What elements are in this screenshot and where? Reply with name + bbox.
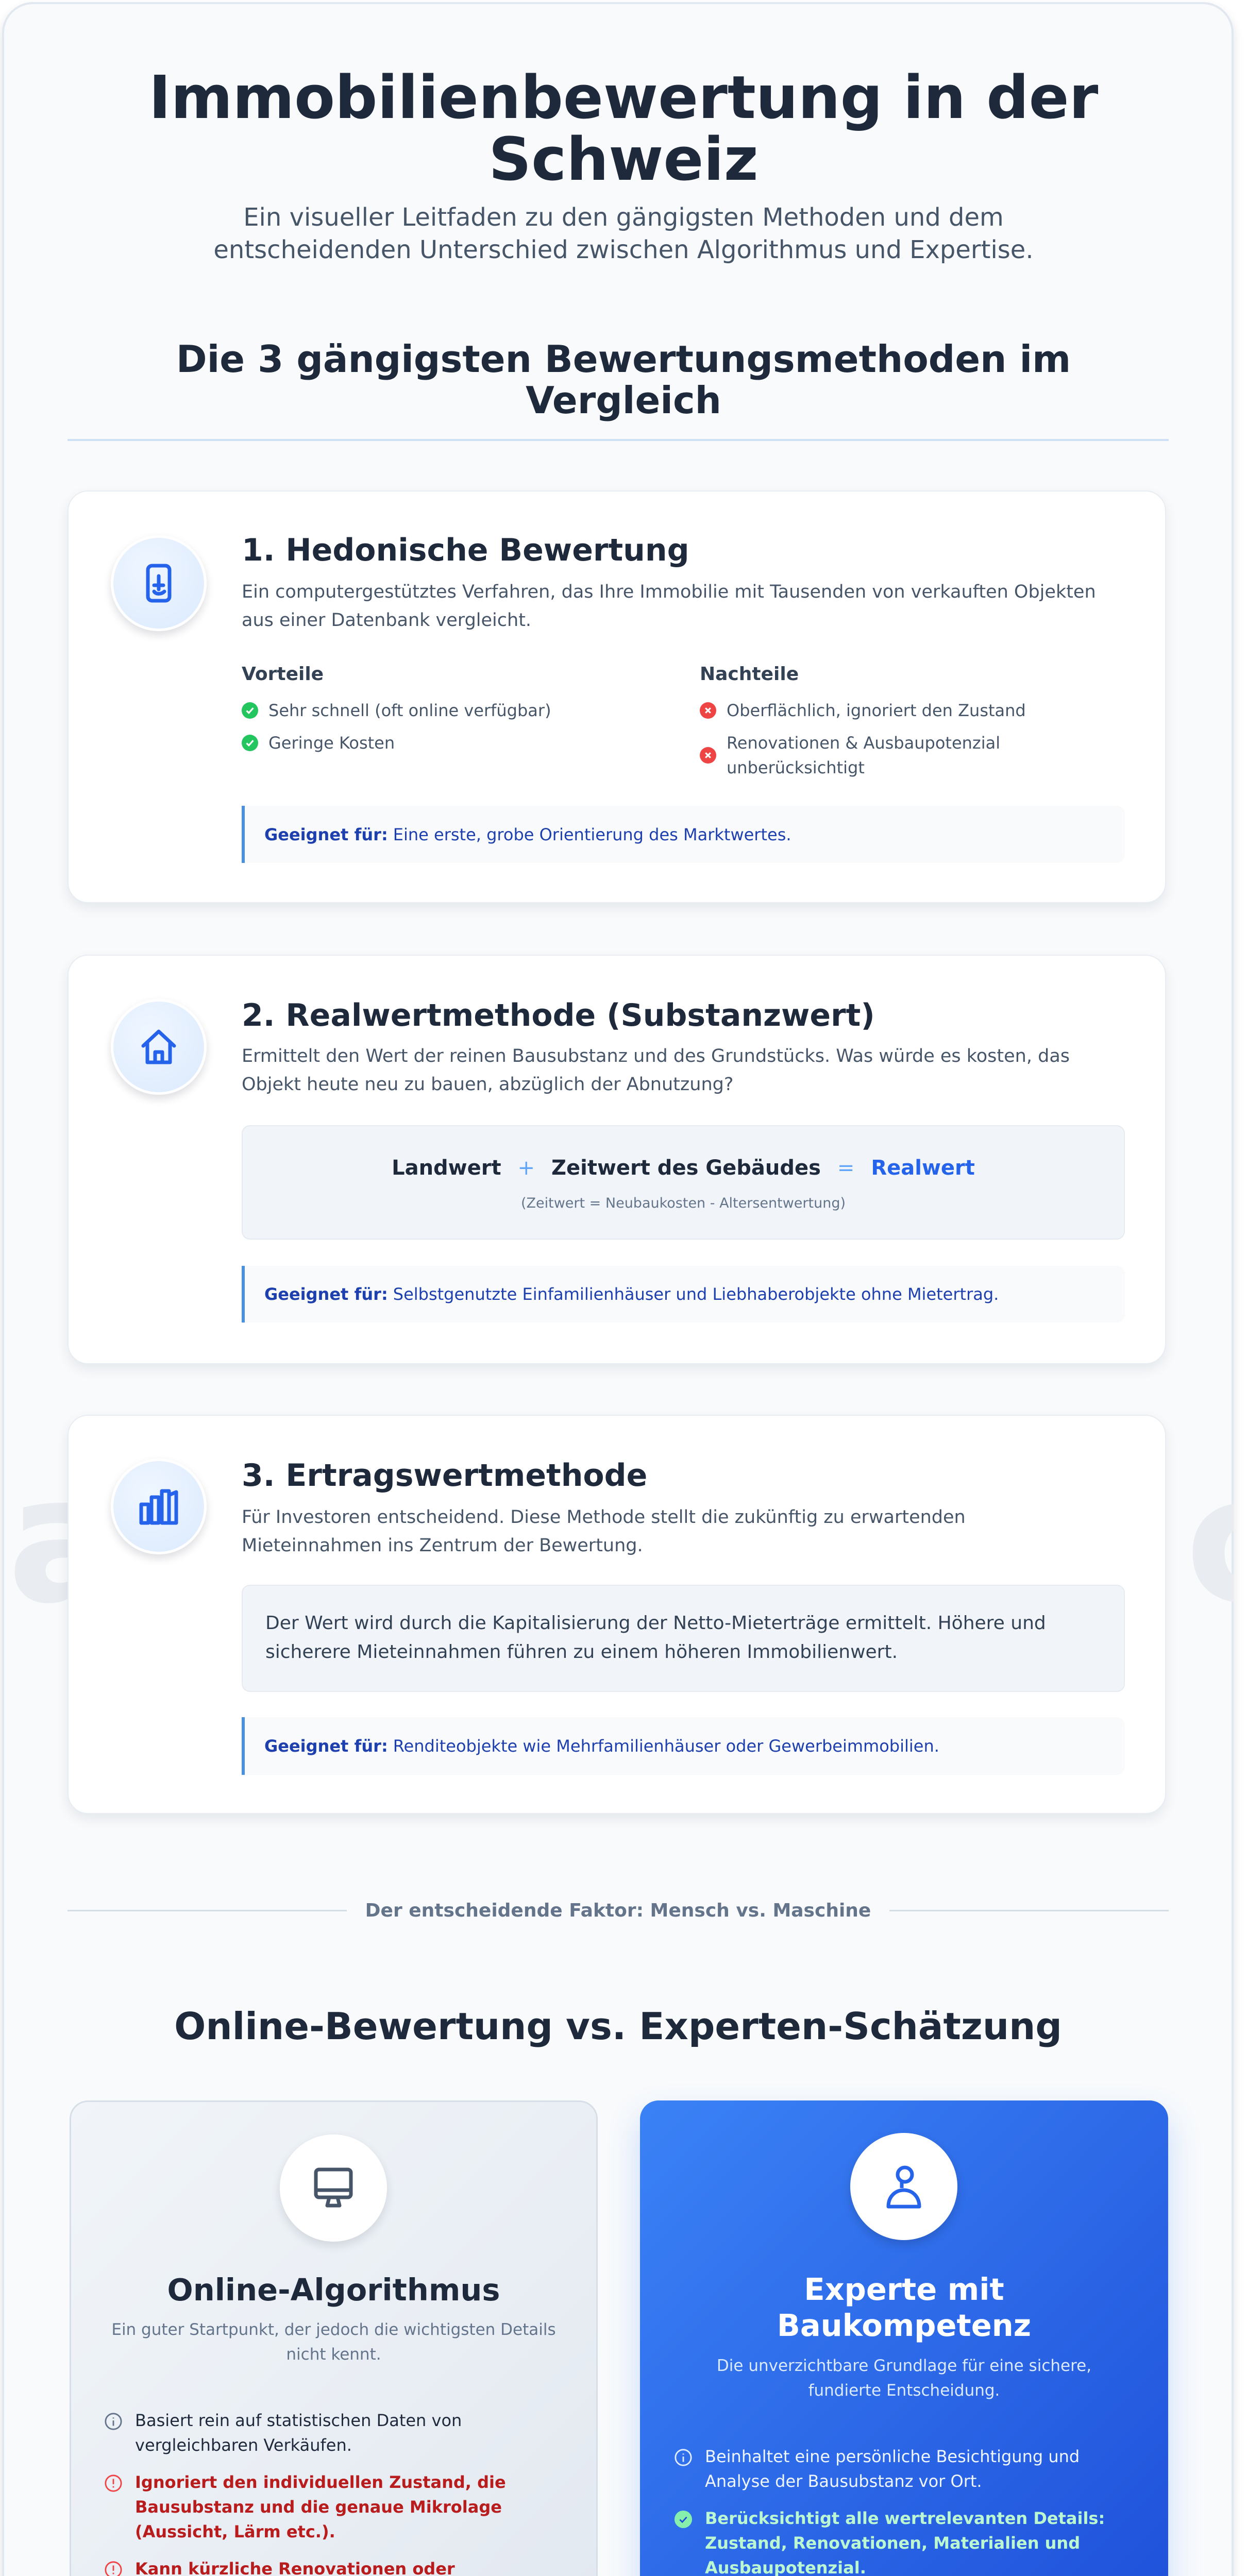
section heading: methods: Die 3 gängigsten Bewertungsmethoden im: [176, 337, 1071, 381]
panel: method 2 real value: [68, 955, 1166, 1364]
list: Basiert rein auf statistischen Daten von: [135, 2411, 462, 2430]
formula box: Landwert + Zeitwert des Gebäudes = Realwert: [392, 1156, 975, 1180]
heading: [777, 2272, 1031, 2343]
cons list: [700, 664, 1026, 777]
description: Ermittelt den Wert der reinen Bausubstanz und des Grundstücks. Was würde es kosten, das: [242, 1046, 1070, 1066]
heading: 3. Ertragswertmethode: [242, 1458, 647, 1494]
pros list: Sehr schnell (oft online verfügbar): [268, 701, 551, 720]
list: Zustand, Renovationen, Materialien und: [705, 2533, 1080, 2553]
list: [675, 2447, 1105, 2576]
pros list: Geringe Kosten: [268, 733, 395, 753]
description: Ein computergestütztes Verfahren, das Ihre Immobilie mit Tausenden von verkauften Objekten: [242, 582, 1096, 602]
title: Immobilienbewertung in der Schweiz: [149, 63, 1098, 194]
subtitle: [717, 2357, 1091, 2400]
description: [242, 1507, 966, 1556]
section heading: methods: [176, 337, 1071, 422]
heading: 1. Hedonische Bewertung: [242, 532, 689, 568]
icon: bar chart: [111, 1459, 207, 1554]
description: [242, 1046, 1070, 1095]
pros list: Vorteile: [242, 664, 324, 685]
cons list: Renovationen & Ausbaupotenzial: [727, 733, 1000, 753]
cons list: unberücksichtigt: [727, 758, 865, 777]
description: Mieteinnahmen ins Zentrum der Bewertung.: [242, 1535, 643, 1556]
subtitle: entscheidenden Unterschied zwischen Algorithmus und Expertise.: [213, 235, 1034, 264]
description: Objekt heute neu zu bauen, abzüglich der Abnutzung?: [242, 1074, 733, 1095]
subtitle: [213, 203, 1034, 264]
watermark letters: [7, 1438, 1234, 1642]
subtitle: Ein visueller Leitfaden zu den gängigsten Methoden und dem: [243, 203, 1004, 232]
watermark letters: a: [7, 1438, 125, 1642]
list: Berücksichtigt alle wertrelevanten Details:: [705, 2509, 1105, 2528]
callout: suitable for: Eine erste, grobe Orientierung des Marktwertes.: [393, 824, 791, 844]
list: Bausubstanz und die genaue Mikrolage: [135, 2497, 502, 2517]
callout: suitable for: Selbstgenutzte Einfamilienhäuser und Liebhaberobjekte ohne Mietertrag.: [393, 1284, 999, 1304]
pros list: [242, 664, 551, 753]
heading: Online-Algorithmus: [167, 2272, 500, 2308]
heading: Experte mit: [804, 2272, 1004, 2307]
description: aus einer Datenbank vergleicht.: [242, 610, 531, 631]
list: Analyse der Bausubstanz vor Ort.: [705, 2471, 982, 2491]
heading: 2. Realwertmethode (Substanzwert): [242, 997, 875, 1033]
section heading: methods: Vergleich: [526, 379, 721, 422]
icon: house: [111, 999, 207, 1095]
cons list: Oberflächlich, ignoriert den Zustand: [727, 701, 1026, 720]
formula box: (Zeitwert = Neubaukosten - Altersentwertung): [521, 1195, 846, 1211]
description: [242, 582, 1096, 631]
callout: suitable for: Geeignet für:: [264, 1284, 388, 1304]
list: vergleichbaren Verkäufen.: [135, 2435, 352, 2455]
icon: touch device: [111, 535, 207, 631]
callout: suitable for: [242, 1266, 1125, 1323]
callout: suitable for: Geeignet für:: [264, 1736, 388, 1756]
icon: person: [850, 2133, 957, 2240]
subtitle: nicht kennt.: [286, 2345, 381, 2364]
description: Für Investoren entscheidend. Diese Methode stellt die zukünftig zu erwartenden: [242, 1507, 966, 1528]
panel: online algorithm: [70, 2100, 598, 2576]
separator: human vs machine: Der entscheidende Faktor: Mensch vs. Maschine: [365, 1900, 871, 1921]
cons list: Nachteile: [700, 664, 799, 685]
section heading: comparison: Online-Bewertung vs. Experten-Schätzung: [174, 2005, 1062, 2048]
subtitle: Ein guter Startpunkt, der jedoch die wichtigsten Details: [111, 2320, 556, 2339]
callout: suitable for: [242, 1717, 1125, 1775]
subtitle: [111, 2320, 556, 2364]
list: [105, 2411, 506, 2576]
subtitle: fundierte Entscheidung.: [808, 2381, 1000, 2400]
panel: method 1 hedonic: [68, 490, 1166, 903]
callout: suitable for: Renditeobjekte wie Mehrfamilienhäuser oder Gewerbeimmobilien.: [393, 1736, 939, 1756]
list: Ignoriert den individuellen Zustand, die: [135, 2472, 506, 2492]
subtitle: Die unverzichtbare Grundlage für eine sichere,: [717, 2357, 1091, 2375]
panel: method 3 income value: [68, 1415, 1166, 1814]
info box: [242, 1585, 1125, 1692]
callout: suitable for: [242, 806, 1125, 863]
info box: sicherere Mieteinnahmen führen zu einem höheren Immobilienwert.: [265, 1641, 898, 1663]
separator: human vs machine: [68, 1900, 1169, 1921]
formula box: [242, 1125, 1125, 1240]
callout: suitable for: Geeignet für:: [264, 824, 388, 844]
icon: monitor: [280, 2134, 387, 2242]
info box: Der Wert wird durch die Kapitalisierung der Netto-Mieterträge ermittelt. Höhere und: [265, 1613, 1046, 1634]
panel: expert: [640, 2100, 1168, 2576]
list: Beinhaltet eine persönliche Besichtigung und: [705, 2447, 1080, 2466]
list: (Aussicht, Lärm etc.).: [135, 2522, 335, 2541]
heading: Baukompetenz: [777, 2308, 1031, 2343]
